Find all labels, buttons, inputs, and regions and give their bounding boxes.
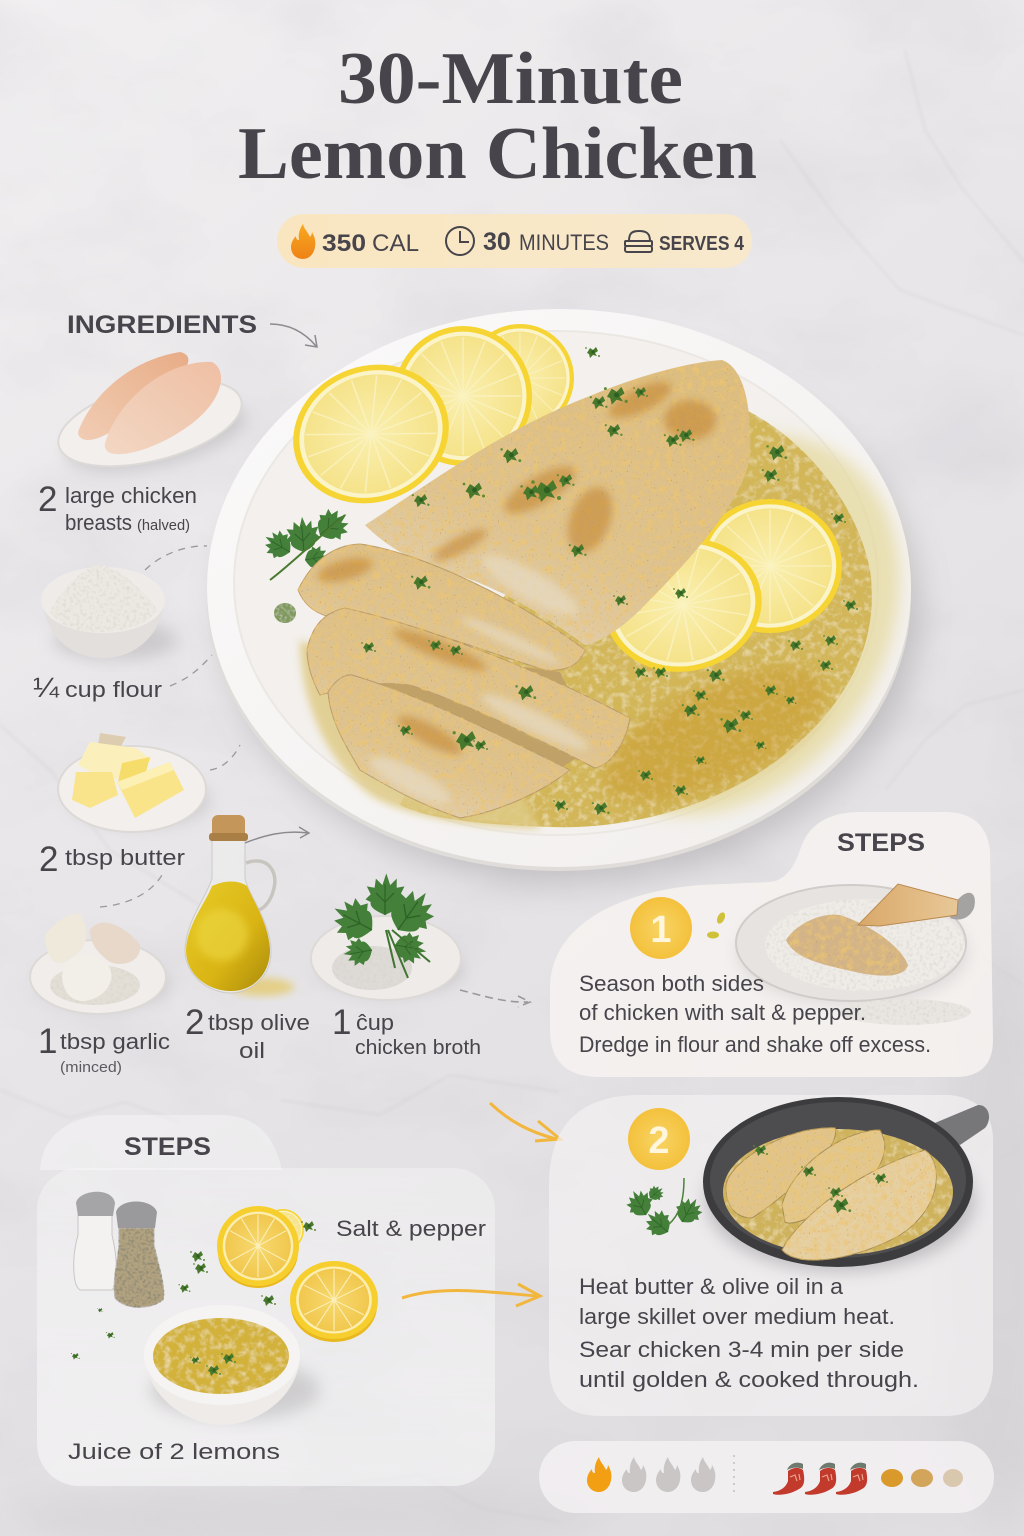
ingredient: chicken broth xyxy=(311,873,481,1059)
skillet with chicken xyxy=(703,1097,989,1272)
sauce xyxy=(478,366,972,884)
step text xyxy=(579,1274,919,1392)
steps heading: STEPS xyxy=(124,1133,211,1161)
icon: flour bowl xyxy=(41,565,177,660)
dashed connector xyxy=(210,745,240,770)
label: tbsp garlic xyxy=(60,1029,170,1054)
chopped parsley xyxy=(361,347,858,815)
quantity: 2 xyxy=(185,1003,204,1042)
calories: 350 xyxy=(322,230,366,257)
note: (minced) xyxy=(60,1059,122,1076)
title xyxy=(238,38,757,195)
icons: chili peppers xyxy=(773,1463,867,1495)
label line 2: (halved) xyxy=(137,517,190,534)
icon: chicken on plate xyxy=(50,352,251,484)
icon: cloche xyxy=(625,231,652,252)
quantity: 1 xyxy=(38,1022,57,1061)
minutes: MINUTES xyxy=(519,230,609,255)
pale chicken cut faces xyxy=(365,545,593,812)
step number badge xyxy=(630,897,692,959)
label line 2: breasts xyxy=(65,510,132,535)
ingredient: flour xyxy=(33,565,177,703)
dashed arrow to step one xyxy=(460,990,530,1007)
minutes: 30 xyxy=(483,228,511,256)
salt and pepper label: Salt & pepper xyxy=(336,1216,486,1241)
step text: large skillet over medium heat. xyxy=(579,1304,895,1329)
icon: garlic on plate xyxy=(30,914,170,1014)
icon: oil bottle xyxy=(185,815,294,996)
panel: step 1 xyxy=(550,812,993,1077)
whole chicken breast xyxy=(365,360,750,645)
panel: steps prep xyxy=(37,1115,495,1486)
step number badge xyxy=(628,1108,690,1170)
stats pill xyxy=(277,214,752,268)
label line 2: oil xyxy=(239,1038,265,1063)
lemon slices front xyxy=(594,499,842,684)
label: large chicken xyxy=(65,483,197,508)
title: Lemon Chicken xyxy=(238,113,757,195)
parsley sprig xyxy=(621,1178,707,1242)
steps heading: STEPS xyxy=(837,829,925,857)
arrow to plate xyxy=(270,324,317,347)
bowl of lemon butter sauce xyxy=(144,1305,320,1425)
oil drops xyxy=(707,911,727,938)
ingredients heading: INGREDIENTS xyxy=(67,311,257,339)
scattered herbs xyxy=(71,1221,316,1360)
lemon slices back xyxy=(274,324,574,525)
quantity: 2 xyxy=(39,840,58,879)
dashed connector xyxy=(145,546,207,570)
icon: butter on plate xyxy=(58,733,210,832)
serves: SERVES 4 xyxy=(659,233,745,255)
icon: clock xyxy=(446,227,474,255)
shadow under chicken slices xyxy=(335,640,596,790)
flour plate with chicken xyxy=(736,884,975,1025)
arrow to step two xyxy=(490,1103,560,1141)
step text: Season both sides xyxy=(579,971,764,996)
title: 30-Minute xyxy=(338,38,683,120)
lemon halves xyxy=(217,1206,378,1342)
calories: CAL xyxy=(372,230,419,257)
dashed connector xyxy=(170,655,212,686)
ingredient: olive oil xyxy=(185,815,310,1063)
quantity and label: ¼ xyxy=(33,672,60,703)
ingredient: butter xyxy=(39,733,210,879)
label line 2: chicken broth xyxy=(355,1036,481,1059)
icons: inactive flames xyxy=(622,1457,715,1492)
arrow from bottle xyxy=(245,827,309,843)
panel: step 2 xyxy=(549,1095,993,1416)
dashed connector xyxy=(100,875,162,907)
icon: active flame xyxy=(587,1457,611,1492)
parsley garnish xyxy=(258,501,357,623)
step text: Heat butter & olive oil in a xyxy=(579,1274,844,1299)
step number badge: 1 xyxy=(650,909,672,951)
ingredient: chicken breasts xyxy=(38,352,251,535)
label: tbsp olive xyxy=(208,1010,310,1035)
salt and pepper shakers xyxy=(74,1192,164,1307)
step text: Sear chicken 3-4 min per side xyxy=(579,1337,904,1362)
panel: rating bar xyxy=(539,1441,994,1513)
arrow to step two xyxy=(402,1284,540,1306)
step text: until golden & cooked through. xyxy=(579,1367,919,1392)
quantity: 1 xyxy=(332,1003,351,1042)
main plate of lemon chicken xyxy=(207,309,972,884)
browned sear marks xyxy=(315,375,716,761)
step text: of chicken with salt & pepper. xyxy=(579,1000,866,1025)
juice label: Juice of 2 lemons xyxy=(68,1439,280,1464)
sliced breast pieces xyxy=(298,544,630,818)
icon: flame xyxy=(291,224,315,259)
step number badge: 2 xyxy=(648,1120,670,1162)
step text: Dredge in flour and shake off excess. xyxy=(579,1032,931,1057)
label: tbsp butter xyxy=(65,845,185,870)
quantity and label: cup flour xyxy=(65,677,162,702)
label: ĉup xyxy=(356,1010,394,1035)
icons: heat dots xyxy=(881,1469,963,1487)
divider xyxy=(733,1455,735,1493)
ingredient: garlic xyxy=(30,914,170,1076)
quantity: 2 xyxy=(38,480,57,519)
icon: parsley on plate xyxy=(311,873,464,1000)
step text xyxy=(579,971,931,1057)
